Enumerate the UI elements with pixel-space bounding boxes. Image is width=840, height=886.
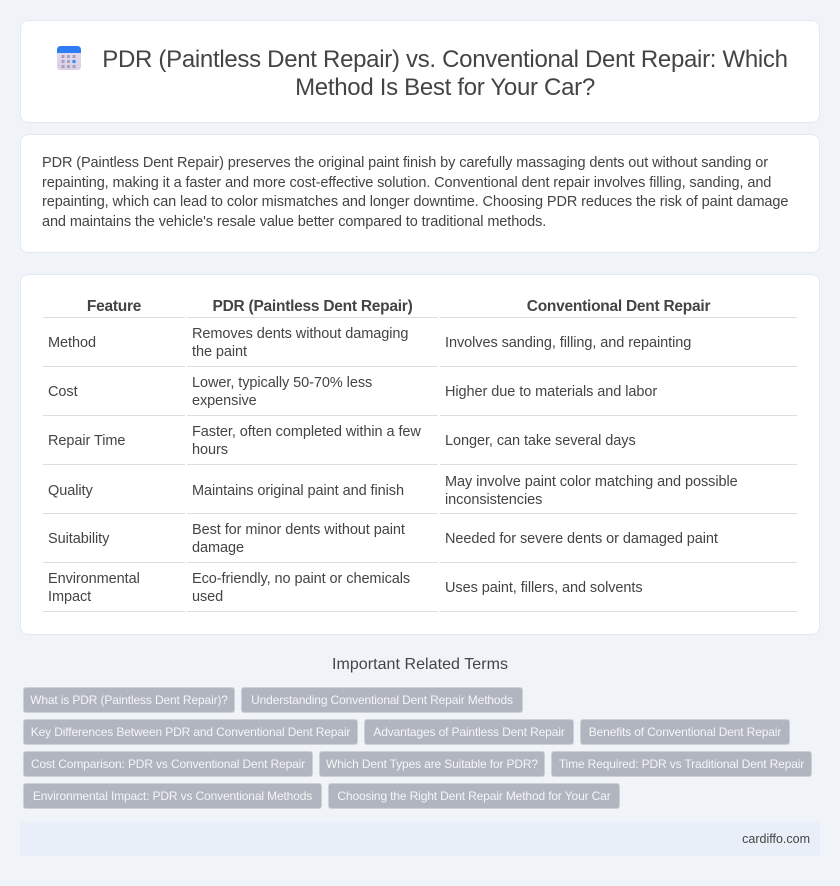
chip: Understanding Conventional Dent Repair Methods <box>251 693 513 707</box>
chip <box>319 751 545 777</box>
row: method: the paint <box>192 344 247 360</box>
chip <box>23 783 322 809</box>
comparison table: PDR (Paintless Dent Repair) <box>213 298 412 315</box>
row: quality: May involve paint color matching and possible <box>445 474 738 490</box>
row: environmental impact: Impact <box>48 589 91 605</box>
intro text: repainting, making it a faster and more cost-effective solution. Conventional dent repair involves filling, sanding, and <box>42 175 771 191</box>
row: cost: expensive <box>192 393 257 409</box>
row: suitability: Suitability <box>48 531 109 547</box>
row: suitability: Best for minor dents without paint <box>192 522 405 538</box>
chip: Benefits of Conventional Dent Repair <box>589 725 781 739</box>
row: repair time <box>48 424 636 458</box>
table header <box>87 298 710 315</box>
chip: Key Differences Between PDR and Conventional Dent Repair <box>31 725 350 739</box>
row: cost: Lower, typically 50-70% less <box>192 375 372 391</box>
row: method <box>48 326 691 360</box>
row: environmental impact <box>48 571 643 605</box>
row: cost: Higher due to materials and labor <box>445 384 657 400</box>
chip <box>364 719 574 745</box>
footer bar <box>20 822 820 856</box>
footer source: cardiffo.com <box>742 832 810 846</box>
title: PDR (Paintless Dent Repair) vs. Conventional Dent Repair: Which <box>102 46 788 72</box>
intro text: PDR (Paintless Dent Repair) preserves the original paint finish by carefully massaging dents out without sanding or <box>42 155 768 171</box>
chip <box>241 687 523 713</box>
chip: Choosing the Right Dent Repair Method for Your Car <box>337 789 611 803</box>
row: environmental impact: used <box>192 589 223 605</box>
row: repair time: Longer, can take several days <box>445 433 636 449</box>
chip <box>23 719 358 745</box>
chip <box>551 751 812 777</box>
intro text <box>42 155 788 230</box>
panel: comparison table card <box>20 274 820 635</box>
row: repair time: Faster, often completed within a few <box>192 424 421 440</box>
chip: Which Dent Types are Suitable for PDR? <box>326 757 538 771</box>
chip: Cost Comparison: PDR vs Conventional Dent Repair <box>31 757 305 771</box>
row: method: Method <box>48 335 96 351</box>
chip: Advantages of Paintless Dent Repair <box>373 725 565 739</box>
comparison table: Feature <box>87 298 141 315</box>
chip: Environmental Impact: PDR vs Conventional Methods <box>33 789 312 803</box>
title: Method Is Best for Your Car? <box>295 74 595 101</box>
related terms heading: Important Related Terms <box>332 656 508 673</box>
intro text: and maintains the vehicle's resale value better compared to traditional methods. <box>42 214 546 230</box>
row: suitability <box>48 522 718 556</box>
row: suitability: Needed for severe dents or damaged paint <box>445 531 718 547</box>
panel: header card <box>20 20 820 123</box>
row: environmental impact: Uses paint, fillers, and solvents <box>445 580 643 596</box>
row: quality: Quality <box>48 483 93 499</box>
row: repair time: hours <box>192 442 228 458</box>
row: quality <box>48 474 738 508</box>
row: environmental impact: Eco-friendly, no paint or chemicals <box>192 571 410 587</box>
row: cost: Cost <box>48 384 78 400</box>
chip: Time Required: PDR vs Traditional Dent Repair <box>559 757 804 771</box>
row: quality: Maintains original paint and finish <box>192 483 404 499</box>
row: cost <box>48 375 657 409</box>
title <box>102 46 788 101</box>
comparison table: Conventional Dent Repair <box>527 298 710 315</box>
comparison table <box>43 298 797 612</box>
chip <box>328 783 620 809</box>
panel: intro card <box>20 134 820 253</box>
row: environmental impact: Environmental <box>48 571 140 587</box>
related terms chips <box>23 687 812 809</box>
chip <box>23 687 235 713</box>
row: method: Involves sanding, filling, and repainting <box>445 335 691 351</box>
intro text: repainting, which can lead to color mismatches and longer downtime. Choosing PDR reduces the risk of paint damage <box>42 194 788 210</box>
row: repair time: Repair Time <box>48 433 125 449</box>
row: quality: inconsistencies <box>445 492 542 508</box>
chip: What is PDR (Paintless Dent Repair)? <box>30 693 228 707</box>
chip <box>580 719 790 745</box>
icon: calendar <box>57 46 81 70</box>
chip <box>23 751 313 777</box>
row: suitability: damage <box>192 540 244 556</box>
row: method: Removes dents without damaging <box>192 326 408 342</box>
